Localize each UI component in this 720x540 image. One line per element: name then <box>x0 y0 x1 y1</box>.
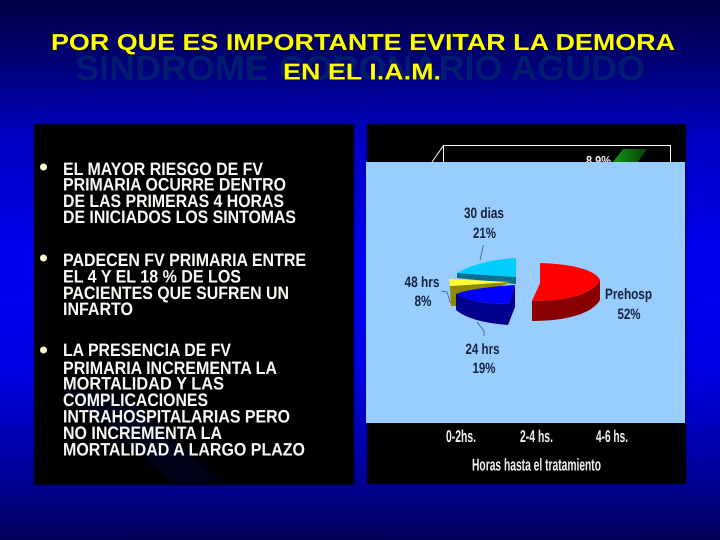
faint streaks in panel <box>60 385 225 485</box>
pie labels <box>404 205 652 377</box>
bullet list: risk of primary VF: MORTALIDAD Y LAS <box>63 374 224 394</box>
axis labels: 0-2hs. <box>446 427 476 446</box>
panel: pie chart overlay <box>366 162 685 423</box>
bullet list: risk of primary VF: PRIMARIA INCREMENTA LA <box>63 358 277 378</box>
slice: 48 hrs 8% <box>449 279 510 306</box>
ghost heading behind title: SINDROME CORONARIO AGUDO <box>75 49 645 88</box>
leader lines <box>442 245 484 336</box>
axis labels: 4-6 hs. <box>596 427 628 446</box>
title <box>51 29 675 84</box>
bullet list: risk of primary VF: NO INCREMENTA LA <box>63 423 222 443</box>
pie labels: Prehosp <box>605 286 652 303</box>
bullet list: risk of primary VF: COMPLICACIONES <box>63 390 208 410</box>
bullet list: risk of primary VF: DE LAS PRIMERAS 4 HORAS <box>63 191 284 211</box>
bullet list: risk of primary VF: PADECEN FV PRIMARIA ENTRE <box>63 250 306 270</box>
panel: chart background <box>367 124 686 484</box>
hidden chart frame: 8.9% <box>586 153 611 168</box>
pie labels: 8% <box>414 293 432 310</box>
bullet list: risk of primary VF: INFARTO <box>63 299 133 319</box>
bullet list: risk of primary VF: INTRAHOSPITALARIAS PERO <box>63 406 290 426</box>
bullet list: risk of primary VF: LA PRESENCIA DE FV <box>63 340 231 360</box>
title: POR QUE ES IMPORTANTE EVITAR LA DEMORA <box>51 29 675 55</box>
pie labels: 21% <box>473 225 496 242</box>
hidden chart frame <box>432 146 670 168</box>
bullet list: risk of primary VF: EL MAYOR RIESGO DE FV <box>63 159 263 179</box>
bullet list: risk of primary VF: EL 4 Y EL 18 % DE LOS <box>63 266 241 286</box>
pie labels: 30 dias <box>464 205 504 222</box>
pie labels: 19% <box>472 360 496 377</box>
slice: 24 hrs 19% <box>456 285 515 325</box>
pie chart <box>442 245 600 336</box>
slice: 30 dias 21% <box>457 258 516 284</box>
axis labels <box>446 427 628 474</box>
title: EN EL I.A.M. <box>283 58 441 84</box>
axis labels: 2-4 hs. <box>520 427 553 446</box>
bullet list: risk of primary VF <box>40 159 306 460</box>
bullet list: risk of primary VF: PRIMARIA OCURRE DENTRO <box>63 174 286 194</box>
axis labels: Horas hasta el tratamiento <box>472 456 601 474</box>
pie labels: 48 hrs <box>404 274 440 291</box>
bullet list: risk of primary VF: PACIENTES QUE SUFREN UN <box>63 283 289 303</box>
bullet list: risk of primary VF: DE INICIADOS LOS SINTOMAS <box>63 207 296 227</box>
pie labels: 24 hrs <box>466 341 500 358</box>
panel: risk text <box>34 124 354 485</box>
pie labels: 52% <box>618 306 640 323</box>
slice: Prehosp 52% <box>532 263 600 321</box>
bullet list: risk of primary VF: MORTALIDAD A LARGO PLAZO <box>63 440 305 460</box>
